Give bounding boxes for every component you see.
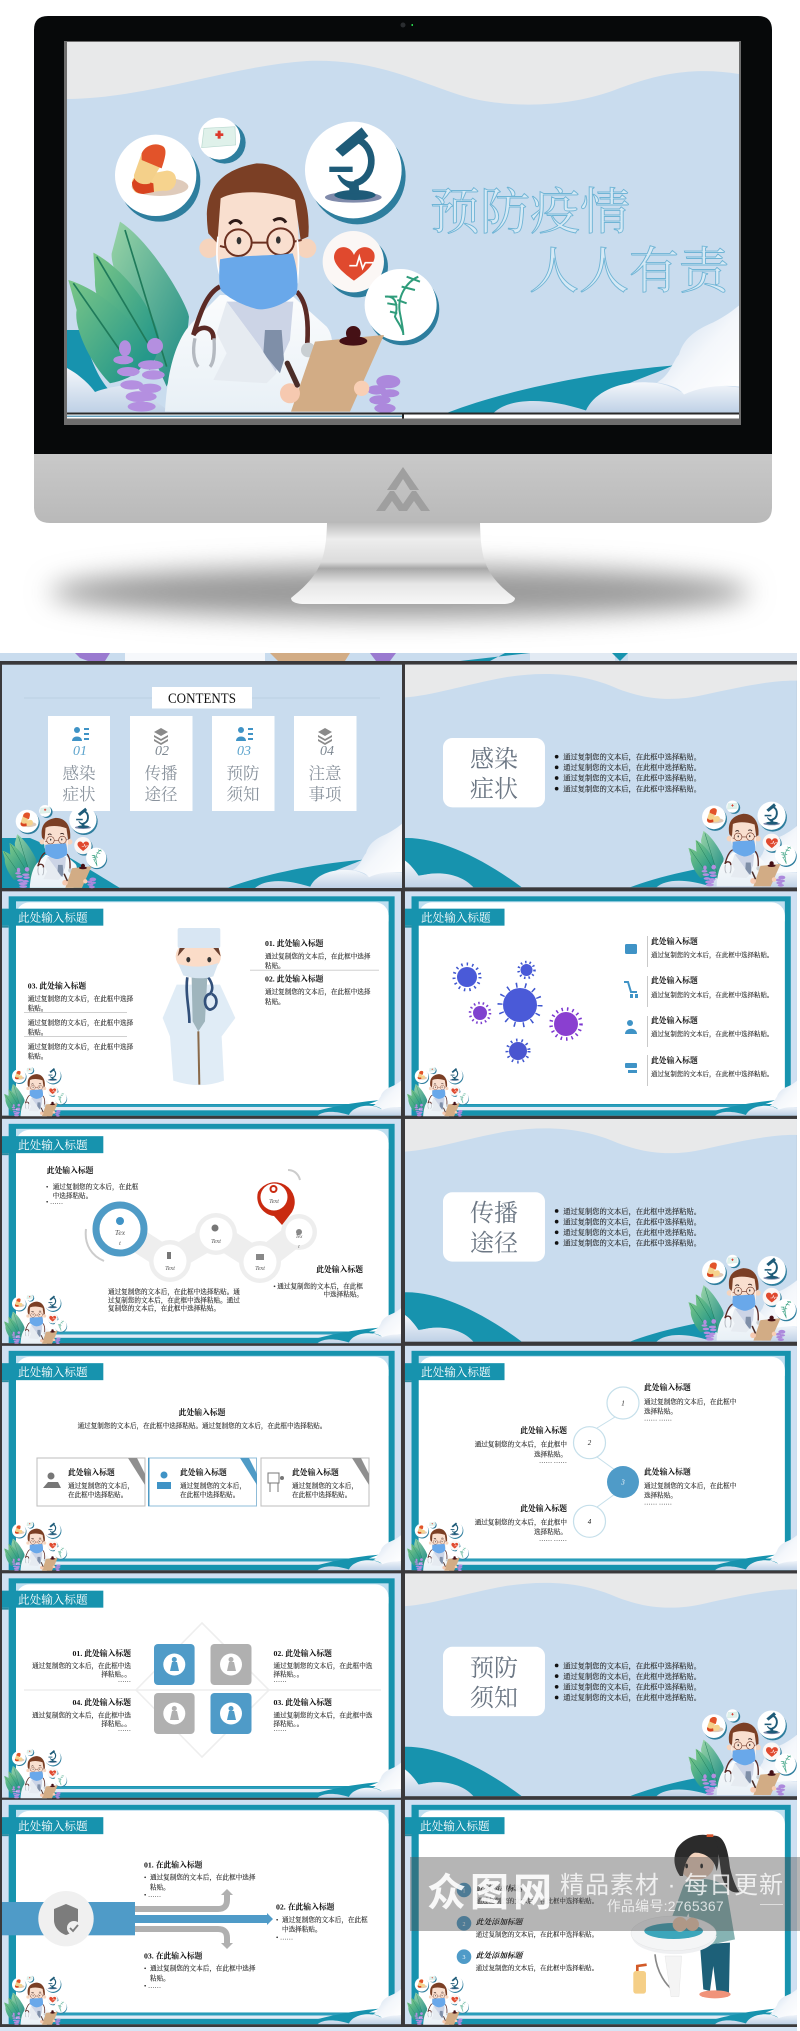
slide grid dark gaps — [0, 661, 797, 2027]
list text: 通过复制您的文本后，在此框中选择粘贴。 — [651, 950, 773, 959]
card two: 在此框中选择粘贴。 — [180, 1490, 239, 1499]
slide: section 传播途径: 通过复制您的文本后，在此框中选择粘贴。 — [563, 1228, 701, 1238]
text 03: 粘贴。 — [28, 1028, 47, 1036]
text right: 此处输入标题 — [316, 1264, 363, 1274]
card 03: 预防 — [226, 764, 260, 783]
list: 通过复制您的文本后，在此框中选择粘贴。 — [476, 1896, 598, 1905]
chain diagram: t — [119, 1241, 121, 1247]
card 01: 感染 — [62, 764, 96, 783]
text 03: 通过复制您的文本后，在此框中选择 — [28, 1018, 134, 1028]
icons — [624, 944, 637, 1073]
card three: 通过复制您的文本后， — [292, 1481, 358, 1491]
card 03: 须知 — [226, 785, 260, 804]
slide: section 感染症状: 通过复制您的文本后，在此框中选择粘贴。 — [563, 774, 701, 784]
cover teal blob — [67, 330, 128, 412]
text right: 02. 此处输入标题 — [274, 1648, 332, 1658]
webcam — [400, 22, 413, 28]
text right: 03. 此处输入标题 — [274, 1697, 332, 1707]
right text: 通过复制您的文本后，在此框中 — [644, 1481, 737, 1491]
text top left: • …… — [46, 1199, 63, 1206]
text top left — [46, 1165, 139, 1206]
text left: …… — [118, 1726, 131, 1733]
screen lower strip — [67, 412, 739, 418]
text left: 01. 此处输入标题 — [73, 1648, 131, 1658]
circles: 3 — [620, 1478, 625, 1486]
slide: section 预防须知 — [405, 1573, 797, 1796]
list: 1 — [462, 1888, 466, 1894]
text left: 04. 此处输入标题 — [73, 1697, 131, 1707]
slide: hand washing: 此处输入标题 — [420, 1819, 490, 1833]
text 03: 通过复制您的文本后，在此框中选择 — [28, 1042, 134, 1052]
right text: 此处输入标题 — [644, 1382, 691, 1392]
contents divider — [24, 698, 380, 699]
card two: 此处输入标题 — [180, 1467, 227, 1477]
card one: 此处输入标题 — [68, 1467, 115, 1477]
chain diagram: t — [298, 1245, 300, 1250]
diamond and divider — [24, 1623, 381, 1757]
text 02 — [276, 1902, 368, 1942]
chain diagram: Text — [269, 1199, 279, 1205]
text 01: 01. 在此输入标题 — [144, 1859, 203, 1869]
watermark logo: 众图网 — [427, 1872, 552, 1915]
list: 此处添加标题 — [476, 1884, 525, 1893]
card one — [37, 1458, 145, 1506]
text right: …… — [274, 1726, 287, 1733]
list: 3 — [462, 1955, 466, 1961]
text right — [273, 1264, 363, 1298]
left text: 此处输入标题 — [520, 1503, 567, 1513]
card 01: 症状 — [62, 785, 96, 804]
list: 通过复制您的文本后，在此框中选择粘贴。 — [476, 1930, 598, 1938]
slide: surgeon: 此处输入标题 — [18, 910, 88, 924]
square tiles — [154, 1644, 252, 1734]
cropped preview strip — [0, 653, 797, 661]
list: 通过复制您的文本后，在此框中选择粘贴。 — [476, 1963, 598, 1972]
text 03 — [144, 1950, 256, 1990]
chain diagram: Text — [255, 1266, 265, 1272]
text 01: • — [144, 1874, 146, 1881]
slide: section 传播途径: 通过复制您的文本后，在此框中选择粘贴。 — [563, 1217, 701, 1227]
cover title: 预防疫情 — [430, 184, 630, 240]
text 02: 通过复制您的文本后，在此框中选择 — [265, 987, 371, 997]
text 02 — [265, 974, 371, 1006]
slide: section 预防须知: 须知 — [470, 1685, 518, 1712]
list: 此处添加标题 — [476, 1951, 525, 1960]
blue band — [2, 1902, 135, 1935]
list text: 通过复制您的文本后，在此框中选择粘贴。 — [651, 990, 773, 999]
contents heading: CONTENTS — [168, 691, 236, 707]
screen underlay — [64, 41, 741, 425]
text 01: • …… — [144, 1892, 161, 1899]
text 02: • — [276, 1917, 278, 1924]
text 01 — [265, 938, 371, 970]
right text: 此处输入标题 — [644, 1467, 691, 1477]
card 04: 注意 — [308, 764, 342, 783]
card 02: 途径 — [144, 785, 178, 804]
slide: arrows: 此处输入标题 — [18, 1819, 88, 1833]
text 02: 通过复制您的文本后，在此框 — [282, 1915, 368, 1925]
text right: 通过复制您的文本后，在此框中选 — [274, 1711, 373, 1721]
card one: 在此框中选择粘贴。 — [68, 1490, 127, 1499]
right text: …… …… — [644, 1416, 672, 1422]
slide: numbered circles: 此处输入标题 — [421, 1365, 491, 1379]
list: 此处添加标题 — [476, 1918, 525, 1926]
text 03: • …… — [144, 1983, 161, 1990]
left text: 选择粘贴。 — [534, 1527, 567, 1536]
chain diagram: Tex — [115, 1228, 126, 1237]
watermark band — [410, 1857, 800, 1931]
text 01: 通过复制您的文本后，在此框中选择 — [150, 1872, 256, 1882]
arrowhead down — [221, 1943, 233, 1949]
text left: 择粘贴。。 — [101, 1719, 131, 1728]
left text — [475, 1425, 567, 1543]
left text: 此处输入标题 — [520, 1425, 567, 1435]
text bottom: 过复制您的文本后，在此框中选择粘贴。通过 — [108, 1296, 240, 1306]
text 03: 03. 在此输入标题 — [144, 1950, 203, 1960]
text 01: 粘贴。 — [150, 1882, 170, 1891]
slide: process chain: 此处输入标题 — [18, 1138, 88, 1152]
slide: virus — [405, 891, 797, 1117]
text 03: 粘贴。 — [150, 1973, 170, 1982]
text 01: 通过复制您的文本后，在此框中选择 — [265, 952, 371, 962]
slide: section 传播途径 — [405, 1119, 797, 1342]
card 01 — [48, 716, 110, 811]
heading: 通过复制您的文本后，在此框中选择粘贴。通过复制您的文本后，在此框中选择粘贴。 — [78, 1421, 326, 1430]
chain diagram: Tex — [296, 1235, 303, 1240]
text 03 — [28, 980, 134, 1060]
cover title — [430, 184, 732, 299]
slide: diamond — [2, 1573, 401, 1799]
slide: section 传播途径: 通过复制您的文本后，在此框中选择粘贴。 — [563, 1207, 701, 1217]
card three: 在此框中选择粘贴。 — [292, 1490, 351, 1499]
shield badge — [38, 1891, 94, 1946]
slide: diamond: 此处输入标题 — [18, 1592, 88, 1606]
card 04 — [294, 716, 356, 811]
text right: • 通过复制您的文本后，在此框 — [273, 1282, 363, 1292]
card three — [261, 1458, 369, 1506]
cover illustration: doctor — [68, 118, 439, 413]
text right — [274, 1648, 373, 1733]
slide: section 感染症状 — [405, 665, 797, 887]
icon: person list — [72, 727, 89, 741]
contents heading — [152, 687, 252, 708]
card 01: 01 — [73, 744, 87, 759]
text 03: 粘贴。 — [28, 1004, 47, 1012]
monitor stand — [291, 523, 515, 604]
text 01 — [144, 1859, 256, 1899]
text top left: • — [46, 1184, 48, 1191]
connectors — [597, 1417, 615, 1507]
watermark id: 作品编号:2765367 — [607, 1898, 724, 1914]
text bottom — [108, 1287, 240, 1314]
card 03: 03 — [237, 744, 251, 759]
slide: section 感染症状: 通过复制您的文本后，在此框中选择粘贴。 — [563, 784, 701, 794]
text left: 通过复制您的文本后，在此框中选 — [32, 1711, 131, 1721]
text 03: 粘贴。 — [28, 1052, 47, 1060]
cover cloud left — [67, 368, 170, 412]
icon: layers — [154, 728, 168, 745]
slide: section 传播途径: 通过复制您的文本后，在此框中选择粘贴。 — [563, 1239, 701, 1249]
right text: 通过复制您的文本后，在此框中 — [644, 1397, 737, 1407]
chain diagram: Text — [165, 1266, 175, 1272]
text bottom: 通过复制您的文本后，在此框中选择粘贴。通 — [108, 1287, 240, 1297]
heading: 此处输入标题 — [179, 1407, 226, 1417]
slide: section 感染症状: 症状 — [470, 776, 518, 803]
slide: section 传播途径: 途径 — [470, 1230, 518, 1257]
slide: section 感染症状: 感染 — [470, 746, 518, 773]
text 03: • — [144, 1965, 146, 1972]
slide: hand washing — [405, 1800, 797, 2025]
list text: 此处输入标题 — [651, 1055, 698, 1065]
monitor logo — [376, 467, 430, 511]
right text: 选择粘贴。 — [644, 1491, 677, 1500]
cover top wave — [67, 42, 739, 105]
text left: …… — [118, 1677, 131, 1684]
chain diagram — [86, 1170, 317, 1283]
text 02: • …… — [276, 1934, 293, 1942]
circles: 2 — [588, 1439, 592, 1447]
left text: …… …… — [539, 1458, 567, 1465]
slide: section 预防须知: 通过复制您的文本后，在此框中选择粘贴。 — [563, 1661, 701, 1671]
icon: person list — [236, 727, 253, 741]
card 04: 04 — [320, 744, 334, 759]
text top left: 中选择粘贴。 — [53, 1191, 92, 1200]
arrow: up — [135, 1893, 227, 1909]
list: 2 — [462, 1922, 466, 1928]
circles: 1 — [621, 1400, 625, 1408]
bottom preview strip — [0, 2027, 797, 2031]
circles — [574, 1387, 639, 1537]
chain diagram: Text — [211, 1239, 221, 1245]
slide: section 预防须知: 通过复制您的文本后，在此框中选择粘贴。 — [563, 1682, 701, 1692]
contents doctor — [3, 805, 107, 888]
text right: 通过复制您的文本后，在此框中选 — [274, 1661, 373, 1671]
text 02: 粘贴。 — [265, 997, 285, 1006]
slide: section 预防须知: 预防 — [470, 1655, 518, 1682]
list text: 此处输入标题 — [651, 975, 698, 985]
list — [457, 1883, 598, 1972]
left text: 选择粘贴。 — [534, 1449, 567, 1458]
slide: process chain — [2, 1119, 401, 1344]
text 03: 03. 此处输入标题 — [28, 980, 86, 990]
text 02: 中选择粘贴。 — [282, 1925, 322, 1934]
slide: three cards — [2, 1346, 401, 1571]
monitor silver chin — [34, 454, 772, 523]
monitor black bezel — [34, 16, 772, 454]
text right: 择粘贴。。 — [274, 1670, 303, 1679]
card two: 通过复制您的文本后， — [180, 1481, 246, 1491]
slide: section 感染症状: 通过复制您的文本后，在此框中选择粘贴。 — [563, 752, 701, 762]
card one: 通过复制您的文本后， — [68, 1481, 134, 1491]
card three: 此处输入标题 — [292, 1467, 339, 1477]
monitor shadow — [50, 566, 750, 618]
right text: 选择粘贴。 — [644, 1406, 677, 1415]
slide: numbered circles — [405, 1346, 797, 1571]
text top left: 通过复制您的文本后，在此框 — [53, 1182, 139, 1192]
slide: surgeon — [2, 891, 401, 1117]
list text — [651, 936, 773, 1078]
circles: 4 — [588, 1518, 592, 1526]
right text: …… …… — [644, 1500, 672, 1506]
slide: three cards: 此处输入标题 — [18, 1365, 88, 1379]
left text: 通过复制您的文本后，在此框中 — [475, 1440, 567, 1450]
card 02: 传播 — [144, 764, 178, 783]
text left: 择粘贴。。 — [101, 1670, 131, 1679]
heading — [78, 1407, 326, 1430]
text right: 择粘贴。。 — [274, 1719, 303, 1728]
virus cluster — [454, 962, 581, 1062]
card 02 — [130, 716, 192, 811]
slide: virus: 此处输入标题 — [421, 910, 491, 924]
contents right decoration — [227, 824, 402, 888]
watermark slogan: 精品素材 · 每日更新 — [560, 1872, 783, 1899]
text top left: 此处输入标题 — [47, 1165, 94, 1175]
arrow: down — [135, 1929, 227, 1944]
card 03 — [212, 716, 274, 811]
cover title: 人人有责 — [529, 243, 732, 299]
text right: …… — [274, 1677, 287, 1684]
left text: 通过复制您的文本后，在此框中 — [475, 1518, 567, 1528]
slide: arrows — [2, 1800, 401, 2025]
arrowhead up — [221, 1889, 233, 1895]
list text: 通过复制您的文本后，在此框中选择粘贴。 — [651, 1029, 773, 1038]
arrow: middle — [135, 1913, 273, 1925]
text right: 中选择粘贴。 — [323, 1290, 363, 1298]
slide: section 预防须知: 通过复制您的文本后，在此框中选择粘贴。 — [563, 1672, 701, 1682]
text 01: 01. 此处输入标题 — [265, 938, 324, 948]
list text: 通过复制您的文本后，在此框中选择粘贴。 — [651, 1069, 773, 1078]
right text — [644, 1382, 737, 1506]
text bottom: 复制您的文本后，在此框中选择粘贴。 — [108, 1304, 220, 1314]
text left — [32, 1648, 131, 1733]
slide: section 感染症状: 通过复制您的文本后，在此框中选择粘贴。 — [563, 763, 701, 773]
text 02: 02. 此处输入标题 — [265, 974, 324, 984]
left text: …… …… — [539, 1536, 567, 1543]
text 03: 通过复制您的文本后，在此框中选择 — [28, 994, 134, 1004]
card 02: 02 — [155, 744, 169, 759]
cover right decoration — [448, 306, 739, 412]
card 04: 事项 — [308, 785, 342, 804]
dividers — [646, 936, 649, 1086]
text 01: 粘贴。 — [265, 961, 285, 970]
screen: cover slide — [67, 42, 739, 413]
slide: contents — [2, 665, 402, 888]
contents teal left — [2, 838, 120, 888]
slide: section 传播途径: 传播 — [470, 1200, 518, 1227]
text 03: 通过复制您的文本后，在此框中选择 — [150, 1963, 256, 1973]
list text: 此处输入标题 — [651, 936, 698, 946]
card two — [148, 1458, 257, 1506]
girl washing hands — [631, 1834, 739, 1998]
icon: layers — [318, 728, 332, 745]
list text: 此处输入标题 — [651, 1015, 698, 1025]
text left: 通过复制您的文本后，在此框中选 — [32, 1661, 131, 1671]
text 02: 02. 在此输入标题 — [276, 1902, 335, 1912]
slide: section 预防须知: 通过复制您的文本后，在此框中选择粘贴。 — [563, 1693, 701, 1703]
surgeon illustration — [163, 928, 235, 1085]
